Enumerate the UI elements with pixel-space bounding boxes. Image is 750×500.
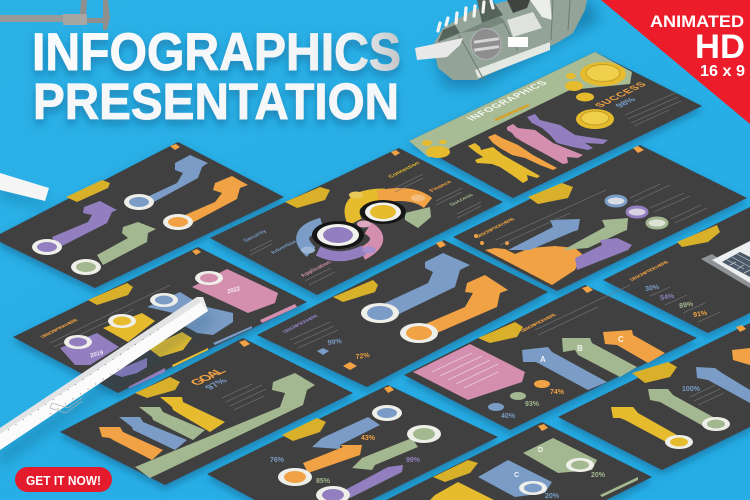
laptop (701, 241, 750, 288)
slide: donut chart: Application (299, 260, 334, 278)
slide: pink block and ABC arrows: 74% (550, 389, 565, 396)
slide: goal: 97% (203, 377, 231, 391)
slide: donut chart (210, 148, 503, 295)
slide: opposing arrows: 43% (361, 435, 376, 442)
slide: tabs (386, 422, 652, 500)
slide: four arrows (0, 142, 284, 288)
red corner banner: ANIMATED (650, 12, 744, 31)
title: PRESENTATION (33, 73, 399, 130)
slide: opposing arrows (207, 385, 498, 500)
slide: description arrows (453, 145, 747, 291)
icon: marker (0, 173, 49, 207)
red corner banner (601, 0, 750, 124)
slide: opposing arrows: 76% (270, 457, 285, 464)
title (32, 23, 401, 130)
slide: laptop percentages (603, 207, 750, 333)
heading: infographics: INFOGRAPHICS (465, 79, 551, 122)
slide: description arrows: DESCRIPTION HERE (474, 217, 518, 239)
button: get it now (15, 467, 112, 492)
slide: pink block and ABC arrows: A (540, 355, 546, 364)
icon: caliper (0, 0, 110, 30)
slide: success silhouettes (409, 52, 702, 198)
slide: pink timeline: DESCRIPTION HERE (39, 318, 81, 339)
slide: two long arrows: DESCRIPTION HERE (281, 314, 321, 334)
red corner banner: 16 x 9 (700, 63, 745, 80)
slide: two long arrows (257, 240, 548, 387)
slide: tabs: C (514, 472, 519, 479)
slide: laptop percentages: DESCRIPTION HERE (628, 260, 672, 282)
slide: laptop percentages: 30% (645, 284, 661, 293)
slide: pink timeline: 2019 (90, 350, 105, 359)
slide: two long arrows: 72% (355, 352, 371, 361)
slide: donut chart: Success (448, 193, 476, 207)
coins (422, 62, 626, 158)
slide: laptop percentages: 89% (679, 301, 695, 310)
slide: laptop percentages: 91% (693, 310, 709, 319)
slide: tabs: 20% (545, 493, 560, 500)
shadow: white roll (0, 312, 212, 466)
slide: right arrows (558, 323, 750, 470)
heading: goal: GOAL (186, 366, 229, 387)
slide: pink block and ABC arrows: B (577, 344, 583, 353)
slide: two long arrows: 99% (327, 338, 343, 347)
slide: pink block and ABC arrows: 93% (525, 401, 540, 408)
header band (409, 52, 632, 157)
slide: donut chart: Security (242, 229, 269, 243)
slide: pink timeline: 2022 (227, 286, 242, 295)
slide: donut chart: Finance (428, 180, 455, 193)
slide: donut chart: Advertise (269, 240, 300, 255)
icon: tool tray (415, 0, 600, 88)
slide: laptop percentages: 54% (660, 293, 676, 302)
slide: tabs: D (538, 447, 543, 454)
slide: pink timeline (13, 247, 307, 393)
slide: right arrows: 100% (682, 386, 701, 393)
title: INFOGRAPHICS (32, 23, 401, 82)
slide: opposing arrows: 85% (316, 478, 331, 485)
button: get it now: GET IT NOW! (26, 474, 101, 488)
silhouettes (468, 114, 608, 183)
slide: goal (60, 338, 353, 485)
slide: opposing arrows: 99% (406, 457, 421, 464)
slide: pink block and ABC arrows (404, 285, 697, 430)
heading: success: SUCCESS (593, 81, 650, 109)
red corner banner: HD (695, 28, 745, 66)
slide: tabs: 20% (591, 472, 606, 479)
slide: pink block and ABC arrows: DESCRIPTION HERE (519, 313, 559, 333)
slide: donut chart: Connection (387, 161, 422, 179)
slide: pink block and ABC arrows: C (618, 335, 624, 344)
slide: pink block and ABC arrows: 40% (501, 413, 516, 420)
slide: success silhouettes: 98% (613, 96, 638, 109)
white roll (0, 297, 208, 450)
